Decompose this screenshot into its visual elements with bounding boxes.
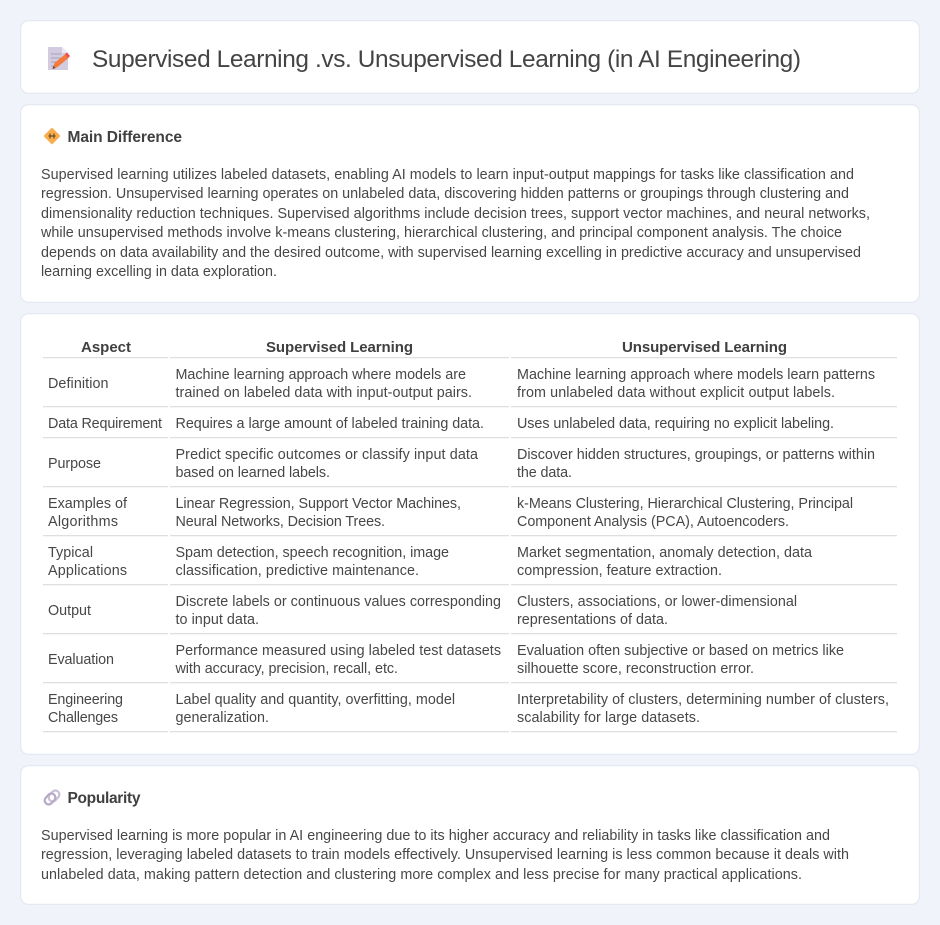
table header row: Unsupervised Learning bbox=[622, 339, 787, 356]
icon: orange diamond bbox=[44, 128, 60, 144]
table row: examples of algorithms: Algorithms bbox=[48, 514, 118, 530]
panel: popularity bbox=[21, 766, 919, 904]
title: Supervised Learning .vs. Unsupervised Learning (in AI Engineering) bbox=[92, 46, 801, 73]
heading: popularity: Popularity bbox=[68, 790, 141, 807]
table row: output: Clusters, associations, or lower-dimensional bbox=[517, 594, 797, 610]
table row: examples of algorithms: k-Means Clustering, Hierarchical Clustering, Principal bbox=[517, 496, 853, 512]
text block: main difference paragraph: regression. Unsupervised learning operates on unlabeled data, discovering hidden patterns or groupings through clustering and bbox=[41, 186, 849, 202]
icon: document with pencil bbox=[48, 47, 70, 70]
table row: examples of algorithms: Component Analysis (PCA), Autoencoders. bbox=[517, 514, 789, 530]
table row: typical applications: classification, predictive maintenance. bbox=[176, 563, 419, 579]
table header row: Supervised Learning bbox=[266, 339, 413, 356]
table row: engineering challenges: scalability for large datasets. bbox=[517, 710, 700, 726]
table row: engineering challenges: Interpretability of clusters, determining number of clusters, bbox=[517, 692, 889, 708]
text block: popularity paragraph: regression, leveraging labeled datasets to train models effectively. Unsupervised learning is less common because it deals with bbox=[41, 847, 849, 863]
table row: purpose: Predict specific outcomes or classify input data bbox=[176, 447, 478, 463]
table row: definition bbox=[43, 367, 897, 407]
table row: data requirement: Data Requirement bbox=[48, 416, 162, 432]
text block: main difference paragraph bbox=[40, 167, 870, 280]
table row: engineering challenges: generalization. bbox=[176, 710, 269, 726]
table row: typical applications: Applications bbox=[48, 563, 127, 579]
table row: output: representations of data. bbox=[517, 612, 668, 628]
text block: main difference paragraph: while unsupervised methods involve k-means clustering, hierarchical clustering, and principal component analysis. The choice bbox=[40, 225, 842, 241]
table row: definition: Machine learning approach where models learn patterns bbox=[517, 367, 875, 383]
text block: main difference paragraph: Supervised learning utilizes labeled datasets, enabling AI models to learn input-output mappings for tasks like classification and bbox=[41, 167, 854, 183]
table row: purpose: the data. bbox=[517, 465, 572, 481]
table row: typical applications bbox=[43, 545, 897, 585]
table row: engineering challenges bbox=[43, 692, 897, 732]
table row: purpose: Discover hidden structures, groupings, or patterns within bbox=[517, 447, 875, 463]
table row: engineering challenges: Challenges bbox=[48, 710, 118, 726]
table row: examples of algorithms: Examples of bbox=[48, 496, 127, 512]
table row: output bbox=[43, 594, 897, 634]
table row: data requirement: Requires a large amount of labeled training data. bbox=[176, 416, 484, 432]
table row: engineering challenges: Label quality and quantity, overfitting, model bbox=[176, 692, 455, 708]
text block: main difference paragraph: depends on data availability and the desired outcome, with supervised learning excelling in predictive accuracy and unsupervised bbox=[41, 245, 861, 261]
table row: output: Output bbox=[48, 603, 91, 619]
table row: definition: trained on labeled data with input-output pairs. bbox=[176, 385, 472, 401]
table row: evaluation: Performance measured using labeled test datasets bbox=[176, 643, 501, 659]
text block: popularity paragraph: Supervised learning is more popular in AI engineering due to its higher accuracy and reliability in tasks like classification and bbox=[41, 828, 830, 844]
table row: purpose bbox=[43, 447, 897, 487]
table row: output: Discrete labels or continuous values corresponding bbox=[176, 594, 501, 610]
panel: main difference bbox=[21, 105, 919, 302]
table row: output: to input data. bbox=[176, 612, 259, 628]
table row: data requirement: Uses unlabeled data, requiring no explicit labeling. bbox=[517, 416, 834, 432]
table row: engineering challenges: Engineering bbox=[48, 692, 123, 708]
table row: evaluation: Evaluation bbox=[48, 652, 114, 668]
table header row bbox=[43, 339, 897, 358]
panel: comparison table bbox=[21, 314, 919, 754]
text block: popularity paragraph: unlabeled data, making pattern detection and clustering more complex and less precise for many practical applications. bbox=[41, 867, 802, 883]
table row: definition: Machine learning approach where models are bbox=[176, 367, 466, 383]
table row: typical applications: Spam detection, speech recognition, image bbox=[176, 545, 449, 561]
table row: definition: from unlabeled data without explicit output labels. bbox=[517, 385, 835, 401]
icon: chain link bbox=[43, 789, 61, 806]
text block: main difference paragraph: learning excelling in data exploration. bbox=[41, 264, 277, 280]
table row: evaluation: with accuracy, precision, recall, etc. bbox=[174, 661, 398, 677]
panel: title header bbox=[21, 21, 919, 93]
text block: main difference paragraph: dimensionality reduction techniques. Supervised algorithms include decision trees, support vector machines, and neural networks, bbox=[41, 206, 870, 222]
text block: popularity paragraph bbox=[41, 828, 849, 883]
table row: evaluation: silhouette score, reconstruction error. bbox=[517, 661, 754, 677]
table row: typical applications: Typical bbox=[48, 545, 93, 561]
table row: typical applications: compression, feature extraction. bbox=[517, 563, 722, 579]
table row: evaluation: Evaluation often subjective or based on metrics like bbox=[517, 643, 844, 659]
table row: typical applications: Market segmentation, anomaly detection, data bbox=[517, 545, 812, 561]
table row: purpose: based on learned labels. bbox=[176, 465, 330, 481]
table row: data requirement bbox=[43, 416, 897, 438]
table row: definition: Definition bbox=[48, 376, 109, 392]
table row: examples of algorithms: Linear Regression, Support Vector Machines, bbox=[176, 496, 461, 512]
table row: purpose: Purpose bbox=[48, 456, 101, 472]
heading: main difference: Main Difference bbox=[68, 129, 182, 146]
table row: evaluation bbox=[43, 643, 897, 683]
table header row: Aspect bbox=[81, 339, 131, 356]
table row: examples of algorithms: Neural Networks, Decision Trees. bbox=[176, 514, 385, 530]
table row: examples of algorithms bbox=[43, 496, 897, 536]
